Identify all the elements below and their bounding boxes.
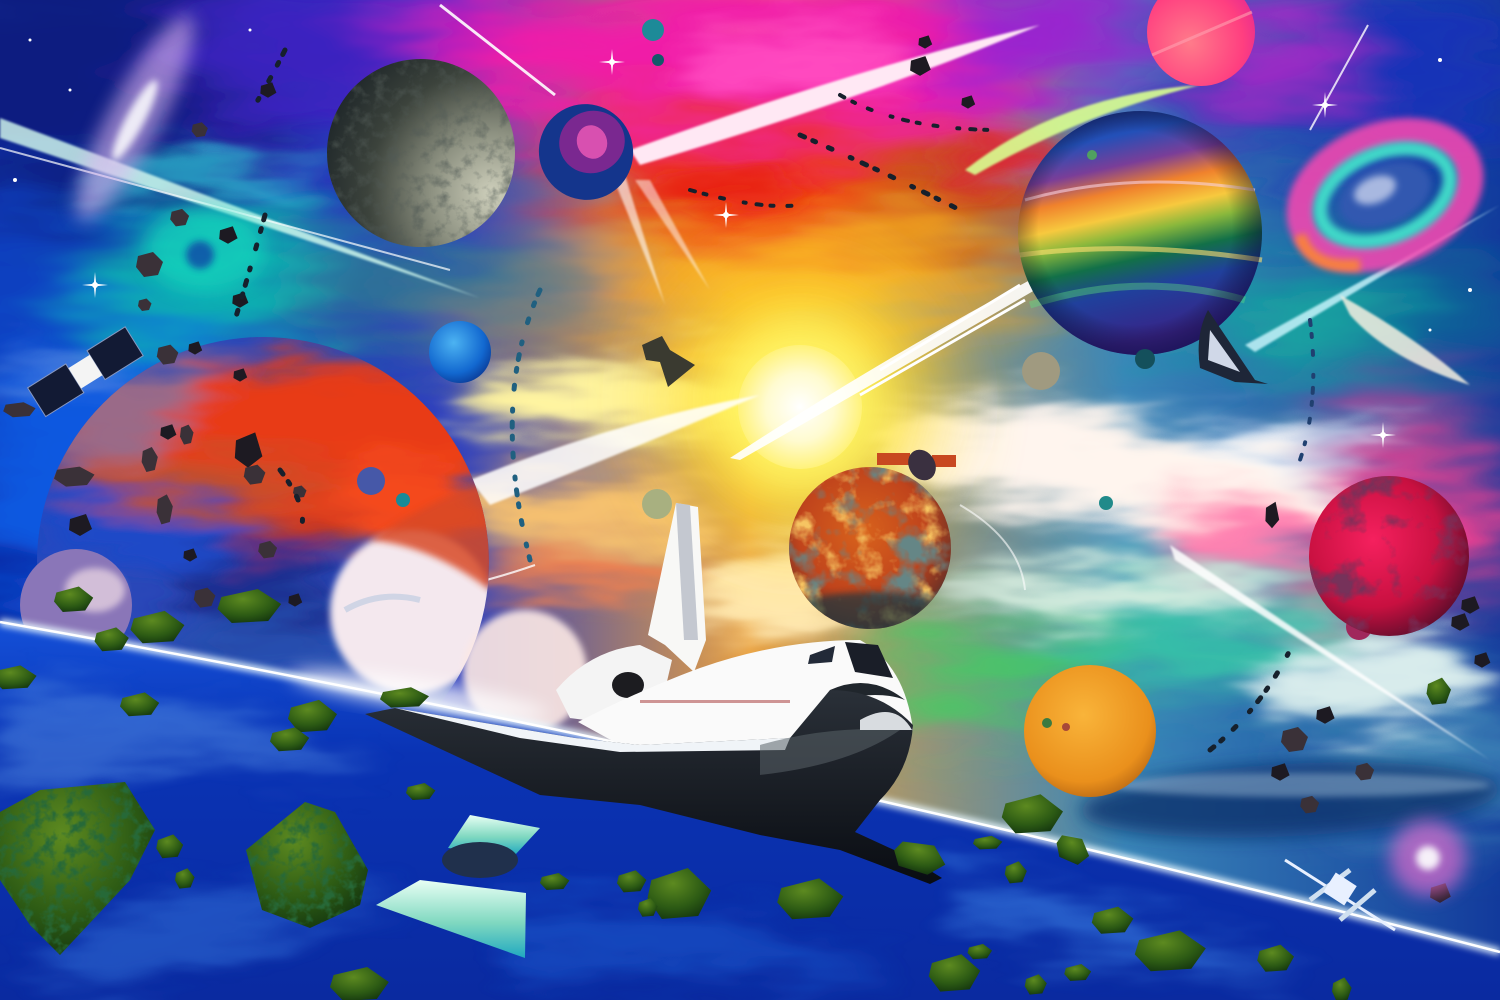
engine pod xyxy=(556,645,672,722)
spiral galaxy cyan xyxy=(145,208,265,292)
galaxy top left xyxy=(58,4,212,232)
striped ringed planet xyxy=(1018,111,1262,369)
green asteroids xyxy=(0,586,1451,1000)
alien saucer xyxy=(525,91,647,213)
pale globe behind shuttle xyxy=(463,610,587,734)
cockpit windows xyxy=(808,646,835,664)
pink planet top xyxy=(1147,0,1255,86)
dust trails xyxy=(235,50,1313,750)
satellite left xyxy=(28,327,143,417)
glow at horizon xyxy=(289,661,551,729)
jupiter-like planet xyxy=(37,337,489,676)
purple planet left xyxy=(20,549,132,661)
satellite over mars xyxy=(877,445,956,485)
stars xyxy=(13,28,1472,448)
blue planet xyxy=(429,321,491,383)
satellite centre xyxy=(642,336,695,387)
wing and hull xyxy=(365,690,942,884)
ship with mirror panels xyxy=(376,815,540,958)
stingray ship xyxy=(1199,310,1268,384)
pink glow bottom right xyxy=(1390,820,1466,896)
comet streaks xyxy=(0,5,1500,760)
white cloudy moon xyxy=(330,480,495,694)
crimson planet xyxy=(1309,476,1469,636)
sun xyxy=(665,265,935,535)
grey moon xyxy=(327,59,515,247)
small beige moon xyxy=(1022,352,1060,390)
small moons xyxy=(357,467,1372,640)
small teal moons top xyxy=(642,19,664,66)
tail fin xyxy=(648,503,706,672)
earth xyxy=(0,622,1500,1000)
space shuttle xyxy=(365,503,942,884)
space station xyxy=(1285,860,1395,930)
mars xyxy=(789,467,951,629)
amber planet xyxy=(1024,665,1156,797)
rainbow ring nebula xyxy=(1282,108,1488,282)
fuselage xyxy=(578,640,913,760)
